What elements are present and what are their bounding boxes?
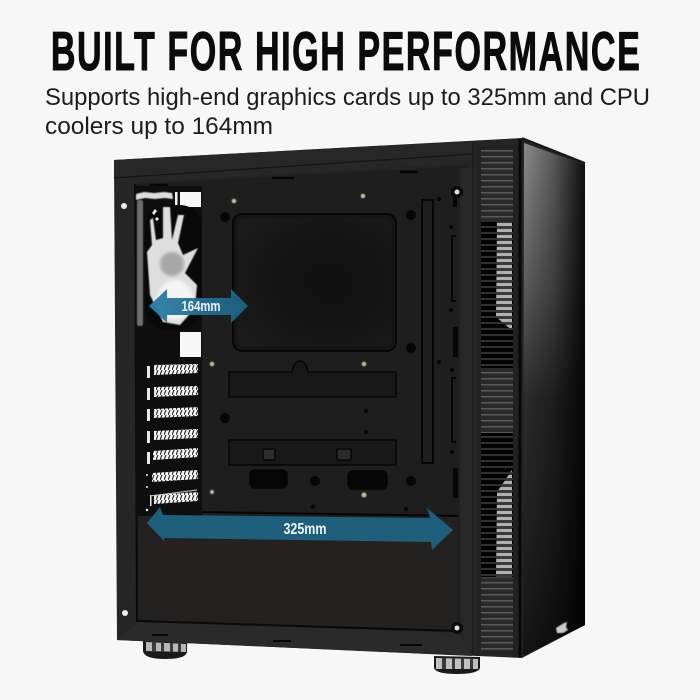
front vent mesh: [477, 146, 519, 654]
arrow: 325mm graphics card clearance: 325mm: [284, 521, 326, 538]
arrow: 164mm CPU cooler clearance: [149, 289, 248, 323]
top edge bar: [114, 141, 472, 184]
left frame: [117, 180, 137, 638]
PC case: [114, 138, 585, 674]
title: BUILT FOR HIGH PERFORMANCE: [51, 21, 640, 82]
arrow: 164mm CPU cooler clearance: 164mm: [182, 299, 220, 315]
feet: [143, 638, 480, 674]
case body: [114, 138, 585, 658]
bottom edge bar: [117, 622, 472, 656]
interior back panel: [136, 166, 468, 632]
CPU cutout: [233, 214, 396, 351]
white cutouts: [175, 192, 201, 357]
PCIe slots: [146, 364, 198, 511]
subtitle: [45, 84, 650, 140]
subtitle: coolers up to 164mm: [45, 113, 273, 140]
mounting holes: [220, 197, 454, 511]
subtitle: Supports high-end graphics cards up to 325mm and CPU: [45, 84, 650, 111]
cable channels: [422, 200, 456, 463]
motherboard standoffs: [210, 194, 366, 497]
arrow: 325mm graphics card clearance: [147, 507, 453, 550]
rear top white mesh: [136, 192, 173, 200]
fan: [137, 200, 202, 330]
brand logo: [556, 622, 568, 633]
side panel: [520, 138, 585, 657]
rear IO column: [136, 186, 202, 521]
PSU shroud: [138, 516, 458, 631]
corner screws: [121, 186, 463, 634]
panel recesses: [229, 361, 396, 489]
right frame: [460, 166, 481, 652]
